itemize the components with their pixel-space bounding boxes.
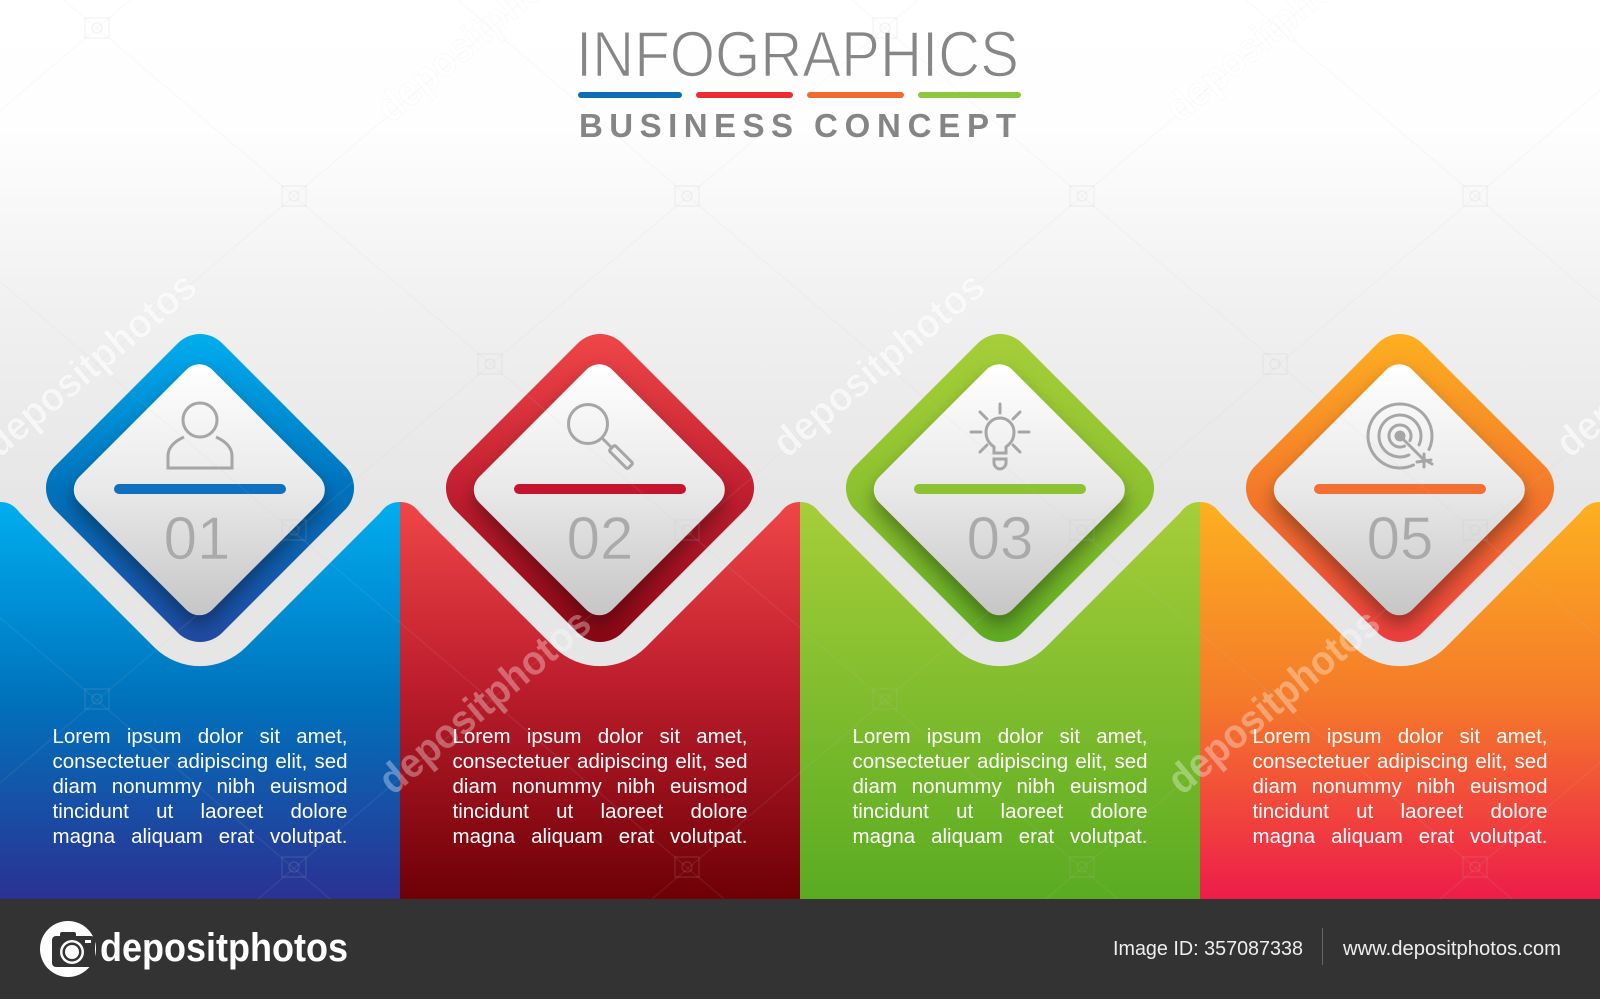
text block: column 3: tincidunt ut laoreet dolore (852, 800, 1148, 823)
text block: column 1 (52, 725, 348, 848)
column: orange (1200, 502, 1600, 899)
text block: column 4: diam nonummy nibh euismod (1252, 775, 1548, 798)
watermark logos on grey: depositphotos (763, 262, 993, 466)
diamond card 01 (33, 321, 367, 655)
title: INFOGRAPHICS (576, 18, 1019, 90)
column: red (400, 502, 800, 899)
text block: column 1: magna aliquam erat volutpat. (52, 825, 348, 848)
footer logo wordmark: depositphotos (100, 926, 348, 970)
text block: column 4: tincidunt ut laoreet dolore (1252, 800, 1548, 823)
text block: column 2: tincidunt ut laoreet dolore (452, 800, 748, 823)
icon: target with arrow (1368, 404, 1432, 468)
diamond card 03: 03 (967, 505, 1033, 572)
diamond card 05: 05 (1367, 505, 1433, 572)
title underlines (578, 92, 1021, 98)
text block: column 2: Lorem ipsum dolor sit amet, (452, 725, 748, 748)
text block: column 3 (852, 725, 1148, 848)
diamond card 02: 02 (567, 505, 633, 572)
text block: column 2 (452, 725, 748, 848)
watermark logos on colour: depositphotos (1158, 599, 1388, 803)
text block: column 4 (1252, 725, 1548, 848)
icon: light bulb (971, 404, 1029, 469)
diamond card 01: 01 (164, 505, 230, 572)
column: blue (0, 502, 400, 899)
footer divider (1322, 928, 1323, 965)
subtitle (579, 107, 1016, 144)
watermark cameras (85, 18, 1487, 877)
subtitle: BUSINESS (579, 107, 793, 144)
text block: column 1: Lorem ipsum dolor sit amet, (52, 725, 348, 748)
icon: person (168, 403, 232, 468)
text block: column 1: consectetuer adipiscing elit, sed (52, 750, 348, 773)
text block: column 2: diam nonummy nibh euismod (452, 775, 748, 798)
watermark logos on colour: depositphotos (369, 599, 599, 803)
diamond card 05 (1233, 321, 1567, 655)
text block: column 3: consectetuer adipiscing elit, sed (852, 750, 1148, 773)
text block: column 3: diam nonummy nibh euismod (852, 775, 1148, 798)
text block: column 2: magna aliquam erat volutpat. (452, 825, 748, 848)
footer bar (0, 899, 1600, 999)
text block: column 1: diam nonummy nibh euismod (52, 775, 348, 798)
watermark logos on grey (0, 0, 1600, 466)
footer image id: Image ID: 357087338 (1113, 938, 1303, 960)
text block: column 4: Lorem ipsum dolor sit amet, (1252, 725, 1548, 748)
text block: column 4: consectetuer adipiscing elit, sed (1252, 750, 1548, 773)
diamond card 02 (433, 321, 767, 655)
column: green (800, 502, 1200, 899)
text block: column 3: Lorem ipsum dolor sit amet, (852, 725, 1148, 748)
text block: column 2: consectetuer adipiscing elit, sed (452, 750, 748, 773)
footer logo icon (40, 921, 96, 977)
footer url: www.depositphotos.com (1342, 938, 1561, 960)
subtitle: CONCEPT (814, 107, 1016, 144)
text block: column 3: magna aliquam erat volutpat. (852, 825, 1148, 848)
text block: column 4: magna aliquam erat volutpat. (1252, 825, 1548, 848)
icon: magnifier (568, 404, 633, 469)
watermark logos on colour (369, 599, 1388, 803)
text block: column 1: tincidunt ut laoreet dolore (52, 800, 348, 823)
diamond card 03 (833, 321, 1167, 655)
